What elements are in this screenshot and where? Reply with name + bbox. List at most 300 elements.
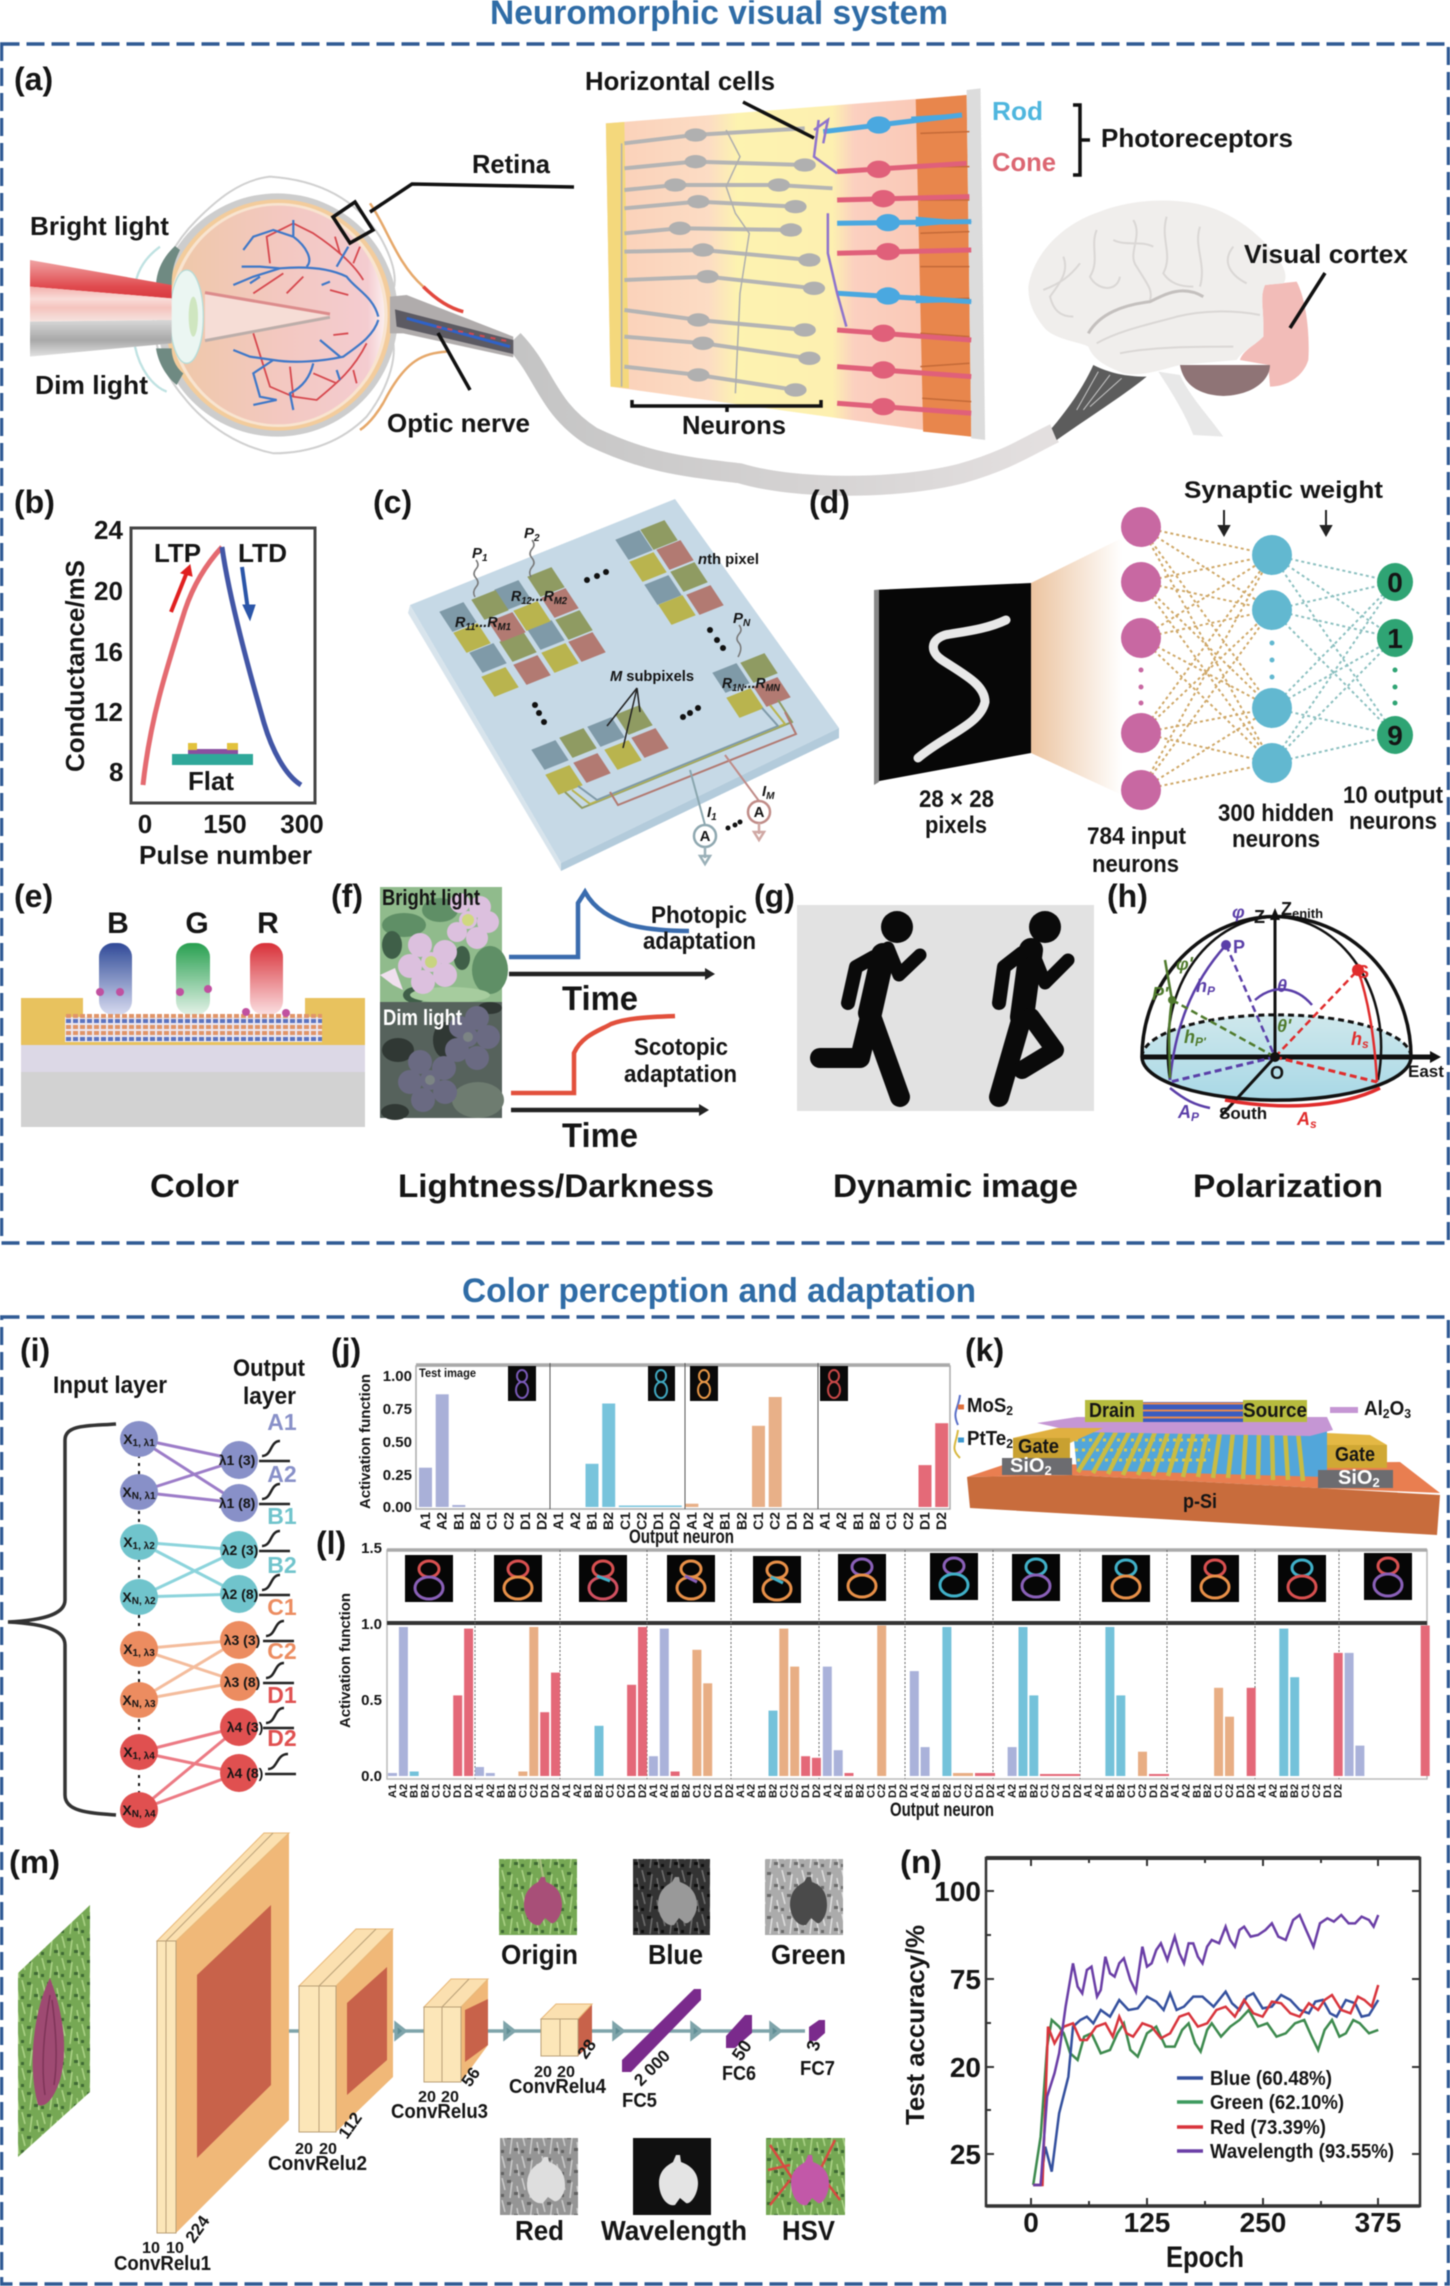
legend: Green (62.10%) [1210,2092,1344,2114]
dome labels: φ [1232,902,1245,922]
x tick labels: D2 [724,1784,736,1798]
layer names: ConvRelu3 [391,2101,488,2123]
channel labels: HSV [782,2215,835,2246]
time label bottom: Time [562,1117,638,1155]
retina callout box and leader [333,184,574,243]
array annotations [455,525,781,845]
x tick labels: D2 [985,1784,997,1798]
retina labels: Optic nerve [387,408,530,438]
x tick labels: D1 [1322,1784,1334,1798]
x tick labels: C1 [617,1512,633,1530]
x axis title: Output neuron [890,1800,994,1821]
x tick labels: C1 [1039,1784,1051,1798]
x tick labels: B2 [1289,1784,1301,1798]
x tick labels: A2 [572,1784,584,1798]
x tick labels: B1 [583,1784,595,1798]
x tick labels: A1 [1083,1784,1095,1798]
layered 2D band [65,1016,322,1042]
array annotations: ...R [475,614,498,631]
label k: (k) [965,1332,1004,1368]
ConvRelu3 block [424,1979,488,2082]
MoS2 channel [1142,1402,1244,1422]
retina labels: Horizontal cells [585,66,775,96]
label m: (m) [9,1844,60,1880]
class labels: B2 [267,1552,297,1578]
x tick labels: C2 [633,1512,649,1530]
photopic curve [509,892,689,957]
signal pulses [474,540,741,657]
network labels: pixels [925,812,987,839]
point markers [1168,940,1364,1062]
y axis labels: 25 [950,2139,981,2170]
flat device icon [172,743,253,765]
dim light photo [380,1002,504,1120]
x tick labels: A2 [1007,1784,1019,1798]
device labels: SiO [1338,1467,1372,1489]
SiO2 left [1002,1458,1072,1475]
output digits: 0 [1387,567,1403,598]
array annotations: R [722,675,733,692]
x tick labels: A2 [659,1784,671,1798]
wiring [565,700,796,825]
adaptation labels: adaptation [624,1061,737,1088]
x tick labels: D2 [550,1784,562,1798]
y axis title: Activation function [337,1593,354,1728]
array annotations: ...R [532,588,554,605]
device labels: 2 [1006,1403,1013,1418]
label a: (a) [14,61,53,97]
input flower image [18,1905,90,2157]
gray background [797,905,1094,1111]
output neurons [1377,563,1413,754]
connections output [1272,555,1395,763]
time arrow top [509,968,715,980]
x tick labels: C2 [441,1784,453,1798]
x axis labels: 0 [138,809,152,839]
dimension numbers: 56 [458,2064,484,2090]
dimension numbers: 20 [557,2064,575,2081]
green vectors [1165,960,1275,1078]
y axis labels: 75 [950,1964,981,1995]
channel image: red [500,2138,578,2215]
x tick labels: C2 [1137,1784,1149,1798]
x tick labels: B1 [450,1512,466,1530]
x tick labels: B2 [467,1512,483,1530]
dome labels: P' [1195,1035,1207,1049]
projection wedge [1031,538,1122,795]
array annotations: 1 [711,812,717,823]
x axis labels [138,809,324,839]
dimension numbers [142,2036,824,2257]
cerebrum [1028,201,1285,374]
panel b: LTP LTD chart [14,484,324,870]
channel image: HSV [766,2138,845,2215]
x tick labels: D1 [783,1512,799,1530]
dome labels: enith [1292,906,1323,921]
x tick labels: A2 [833,1784,845,1798]
retina labels: Dim light [35,370,148,400]
output neuron labels: λ3 (8) [224,1674,260,1690]
retinal blood vessels [233,220,378,410]
label i: (i) [20,1332,50,1368]
x tick labels: D1 [650,1512,666,1530]
network labels: neurons [1092,851,1179,878]
array annotations: 11 [465,622,476,633]
bright light label: Bright light [382,885,481,910]
network labels: neurons [1232,826,1320,853]
output digits: 1 [1387,623,1403,654]
connections [1141,527,1272,790]
panel k: device schematic [954,1332,1440,1535]
x tick labels: D2 [1159,1784,1171,1798]
arrow flow line [236,2024,805,2038]
layer titles: layer [243,1383,296,1410]
y axis labels [934,1876,981,2170]
LTP and LTD labels [154,538,287,568]
output neuron labels: λ1 (8) [219,1495,255,1511]
dimension numbers: 50 [728,2036,756,2064]
bars [419,1394,948,1507]
output digits [1387,567,1403,751]
chart frame [387,1550,1427,1779]
retina labels [30,66,1409,440]
dimension numbers: 3 [803,2038,824,2053]
axes [1142,908,1441,1116]
device labels: Al [1364,1398,1384,1420]
panel f: lightness adaptation [331,878,756,1204]
label h: (h) [1107,878,1148,914]
x tick labels: A1 [996,1784,1008,1798]
brain stem [1158,372,1223,437]
device labels: 3 [1404,1406,1411,1421]
device labels: 2 [1383,1406,1390,1421]
x tick labels: C1 [778,1784,790,1798]
dim light label: Dim light [383,1005,463,1030]
input neuron labels: X [122,1484,132,1500]
input neuron labels: X [122,1692,132,1708]
dome labels: s [1310,1117,1317,1131]
panel c: pixel array [373,484,839,871]
x tick labels: D1 [974,1784,986,1798]
x tick labels: B1 [1278,1784,1290,1798]
device labels: 2 [1044,1463,1052,1478]
output neuron labels [219,1452,263,1781]
flat label: Flat [188,766,234,796]
x tick labels: C1 [883,1512,899,1530]
x tick labels: A1 [387,1784,399,1798]
x tick labels: A2 [567,1512,583,1530]
input neuron labels [122,1431,156,1820]
x tick labels: A1 [561,1784,573,1798]
output neurons [220,1441,258,1792]
output neuron labels: λ3 (3) [224,1632,260,1648]
network labels: neurons [1349,808,1437,835]
x tick labels: D1 [1235,1784,1247,1798]
x tick labels: A1 [648,1784,660,1798]
dome labels: θ [1277,976,1287,996]
panel m: CNN architecture [9,1833,846,2275]
y axis labels: 24 [94,515,123,545]
x tick labels: D2 [933,1512,949,1530]
x tick labels: D1 [452,1784,464,1798]
input neuron labels: X [123,1641,133,1657]
incoming bright light beam [30,260,172,298]
legend: Wavelength (93.55%) [1210,2141,1394,2163]
x axis labels [1023,2207,1401,2238]
label b: (b) [14,484,55,520]
x tick labels: C1 [517,1784,529,1798]
array annotations: MN [766,683,781,694]
legend: Red (73.39%) [1210,2117,1326,2139]
dome labels: s [1362,1037,1369,1051]
x axis labels: 0 [1023,2207,1039,2238]
y axis labels: 0.25 [383,1467,412,1484]
x tick labels: B2 [1028,1784,1040,1798]
cornea and ciliary body [156,246,183,385]
x tick labels: D2 [1072,1784,1084,1798]
input neuron labels: X [123,1744,133,1760]
output neuron labels: λ4 (8) [227,1765,263,1781]
x tick labels: B2 [420,1784,432,1798]
x tick labels: C2 [1050,1784,1062,1798]
bars [388,1626,1430,1776]
x tick labels: A1 [417,1512,433,1530]
y axis labels [383,1368,412,1516]
panel a: visual pathway [14,61,1409,486]
label d: (d) [809,484,850,520]
input neuron labels: N, λ2 [132,1596,156,1607]
y axis labels: 1.00 [383,1368,412,1385]
x tick labels: A2 [746,1784,758,1798]
connections [139,1439,239,1810]
retina labels: Retina [472,149,551,179]
layer names: FC7 [800,2058,835,2080]
x tick labels: C1 [1213,1784,1225,1798]
dome arcs [1142,916,1411,1100]
x tick labels: B1 [844,1784,856,1798]
x tick labels: D1 [916,1512,932,1530]
x tick labels: B1 [1104,1784,1116,1798]
device labels: MoS [967,1395,1009,1417]
label e: (e) [14,878,53,914]
device labels: 2 [1372,1475,1380,1490]
input neuron labels: X [122,1589,132,1605]
ellipsis dots [532,569,742,830]
x tick labels: B2 [507,1784,519,1798]
input neuron labels: 1, λ2 [133,1541,155,1552]
array annotations: 1 [482,553,488,564]
panel frame: neuromorphic visual system [2,44,1448,1243]
array annotations: 1N [732,683,745,694]
x tick labels: B1 [496,1784,508,1798]
dome labels: Z [1254,907,1265,927]
x tick labels: C2 [767,1512,783,1530]
test image caption: Test image [419,1366,476,1380]
x tick labels: A2 [434,1512,450,1530]
array annotations: P [524,525,534,542]
network labels [919,477,1443,878]
caption lightness: Lightness/Darkness [398,1168,714,1204]
x tick labels: D1 [517,1512,533,1530]
array annotations: nth pixel [698,551,759,568]
subpixel arrows [607,688,640,748]
y axis labels: 100 [934,1876,981,1907]
dome labels: φ' [1176,954,1194,974]
panel e: color device [14,878,365,1204]
x tick labels: A1 [474,1784,486,1798]
y axis labels: 16 [94,637,123,667]
y axis labels: 0.75 [383,1401,412,1418]
x tick labels: C2 [702,1784,714,1798]
chart frame [416,1363,950,1509]
array annotations: P [472,545,482,562]
y axis labels: 8 [109,757,123,787]
nanostructure channel [1073,1430,1327,1481]
dome labels: Z [1281,899,1292,919]
y axis labels: 1.0 [361,1616,382,1633]
class labels: B1 [267,1503,297,1529]
adaptation labels: adaptation [643,928,756,955]
x axis title: Output neuron [629,1527,734,1548]
y axis labels: 20 [950,2052,981,2083]
test image thumbnails [508,1366,848,1401]
x tick labels: D2 [534,1512,550,1530]
x tick labels: C1 [865,1784,877,1798]
x tick labels: D2 [811,1784,823,1798]
dome labels [1152,899,1444,1131]
x tick labels: A1 [683,1512,699,1530]
panel j: test image activation chart [331,1332,950,1548]
x tick labels: D1 [626,1784,638,1798]
pointer brackets [954,1395,964,1458]
label j: (j) [331,1332,361,1368]
dome labels: h [1196,976,1207,996]
RGB letters: B [107,907,129,940]
dome labels: h [1351,1029,1362,1049]
x tick labels: C2 [876,1784,888,1798]
dimension numbers: 10 [142,2240,160,2257]
x tick labels: B1 [409,1784,421,1798]
x tick labels: A1 [1257,1784,1269,1798]
FC layers [622,1989,825,2072]
x tick labels: B1 [930,1784,942,1798]
x tick labels: A1 [1170,1784,1182,1798]
array annotations: 12 [521,596,532,607]
array annotations: M subpixels [610,668,694,685]
title: color perception and adaptation: Color perception and adaptation [462,1272,976,1310]
panel h: polarization dome [1107,878,1444,1204]
input neuron labels: 1, λ4 [133,1751,155,1762]
channel labels: Wavelength [601,2215,747,2246]
MNIST digit image [874,583,1031,785]
dome labels: θ' [1277,1016,1292,1036]
SiO2 right [1318,1470,1393,1488]
x tick labels: C2 [900,1512,916,1530]
x tick labels: D1 [1061,1784,1073,1798]
dome labels: P [1207,984,1216,998]
ammeters [694,801,770,864]
x tick labels: B2 [854,1784,866,1798]
LTD curve [222,547,301,785]
output neuron labels: λ2 (3) [222,1542,258,1558]
gate right [1327,1433,1387,1468]
array annotations: I [762,783,766,800]
x axis title: Epoch [1166,2241,1244,2274]
optic nerve ribbon to brain [513,340,1054,486]
output neuron labels: λ4 (3) [227,1719,263,1735]
dimension numbers: 20 [418,2089,436,2106]
label c: (c) [373,484,412,520]
dimension numbers: 20 [441,2089,459,2106]
x tick labels: A1 [735,1784,747,1798]
eye illustration [30,177,513,453]
dimension numbers: 20 [534,2064,552,2081]
horizon disc [1142,1015,1411,1100]
channel labels [501,1939,846,2246]
device labels: PtTe [967,1428,1009,1450]
device labels: SiO [1010,1455,1044,1477]
chart frame [986,1858,1420,2206]
x tick labels: C1 [484,1512,500,1530]
dimension numbers: 2 000 [630,2046,674,2090]
RGB letters: R [257,907,279,940]
input neurons [120,1421,158,1828]
x tick labels: D2 [667,1512,683,1530]
class labels: D2 [267,1725,297,1751]
cerebellum [1180,365,1270,396]
beams after lens [205,293,330,340]
x tick labels: A1 [817,1512,833,1530]
light columns [99,943,283,1015]
lens [170,270,203,363]
class labels: D1 [267,1682,297,1708]
LTP and LTD labels: LTP [154,538,201,568]
x tick labels: A2 [700,1512,716,1530]
RGB letters [107,907,279,940]
y axis labels: 12 [94,697,123,727]
device labels: Gate [1018,1436,1059,1458]
x tick labels: D2 [1246,1784,1258,1798]
x tick labels: C1 [1126,1784,1138,1798]
chart frame [131,528,315,803]
y axis labels: 0.5 [361,1692,382,1709]
class labels: A1 [267,1409,297,1435]
x tick labels: A1 [550,1512,566,1530]
x tick labels: D1 [887,1784,899,1798]
x tick labels: B2 [594,1784,606,1798]
visual cortex [1240,282,1309,387]
x tick labels: C1 [430,1784,442,1798]
x tick labels: A2 [485,1784,497,1798]
molecules [96,985,290,1017]
array annotations: I [707,804,711,821]
dome labels: South [1219,1104,1267,1123]
input neuron labels: N, λ1 [132,1491,156,1502]
output activation signals [259,1441,296,1774]
array annotations: M [766,791,775,802]
dimension numbers: 112 [335,2109,366,2142]
x tick labels: C2 [615,1784,627,1798]
x tick labels: B1 [1191,1784,1203,1798]
input neuron labels: X [123,1534,133,1550]
input neuron labels: X [122,1802,132,1818]
adaptation labels: Photopic [651,902,747,929]
time label top: Time [562,980,638,1018]
brace [8,1424,116,1815]
incoming dim light beam [30,320,172,357]
device labels: Gate [1335,1444,1375,1466]
dome labels: P [1191,1110,1200,1124]
